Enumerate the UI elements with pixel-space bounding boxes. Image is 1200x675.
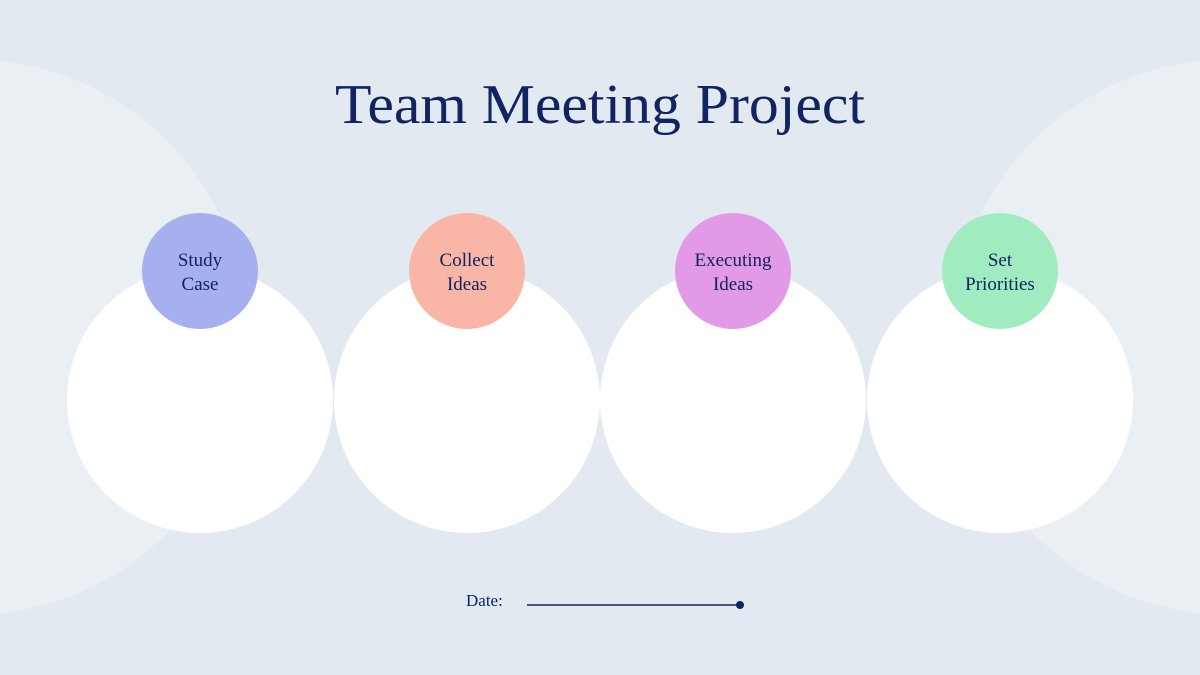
title: Team Meeting Project — [335, 74, 865, 136]
step 1: Study Case — [67, 213, 333, 533]
step 3: Executing Ideas: Executing — [694, 250, 772, 271]
step 2: Collect Ideas: Ideas — [447, 274, 487, 295]
step 4: Set Priorities: Set — [988, 250, 1013, 271]
step 2: Collect Ideas — [334, 213, 600, 533]
step 3: Executing Ideas: Ideas — [713, 274, 753, 295]
step 2: Collect Ideas: Collect — [440, 250, 495, 271]
step 4: Set Priorities: Priorities — [965, 274, 1035, 295]
date field — [466, 591, 744, 610]
step 1: Study Case: Case — [182, 274, 218, 295]
step 1: Study Case: Study — [178, 250, 223, 271]
date field: Date: — [466, 591, 503, 610]
step 4: Set Priorities — [867, 213, 1133, 533]
step 3: Executing Ideas — [600, 213, 866, 533]
